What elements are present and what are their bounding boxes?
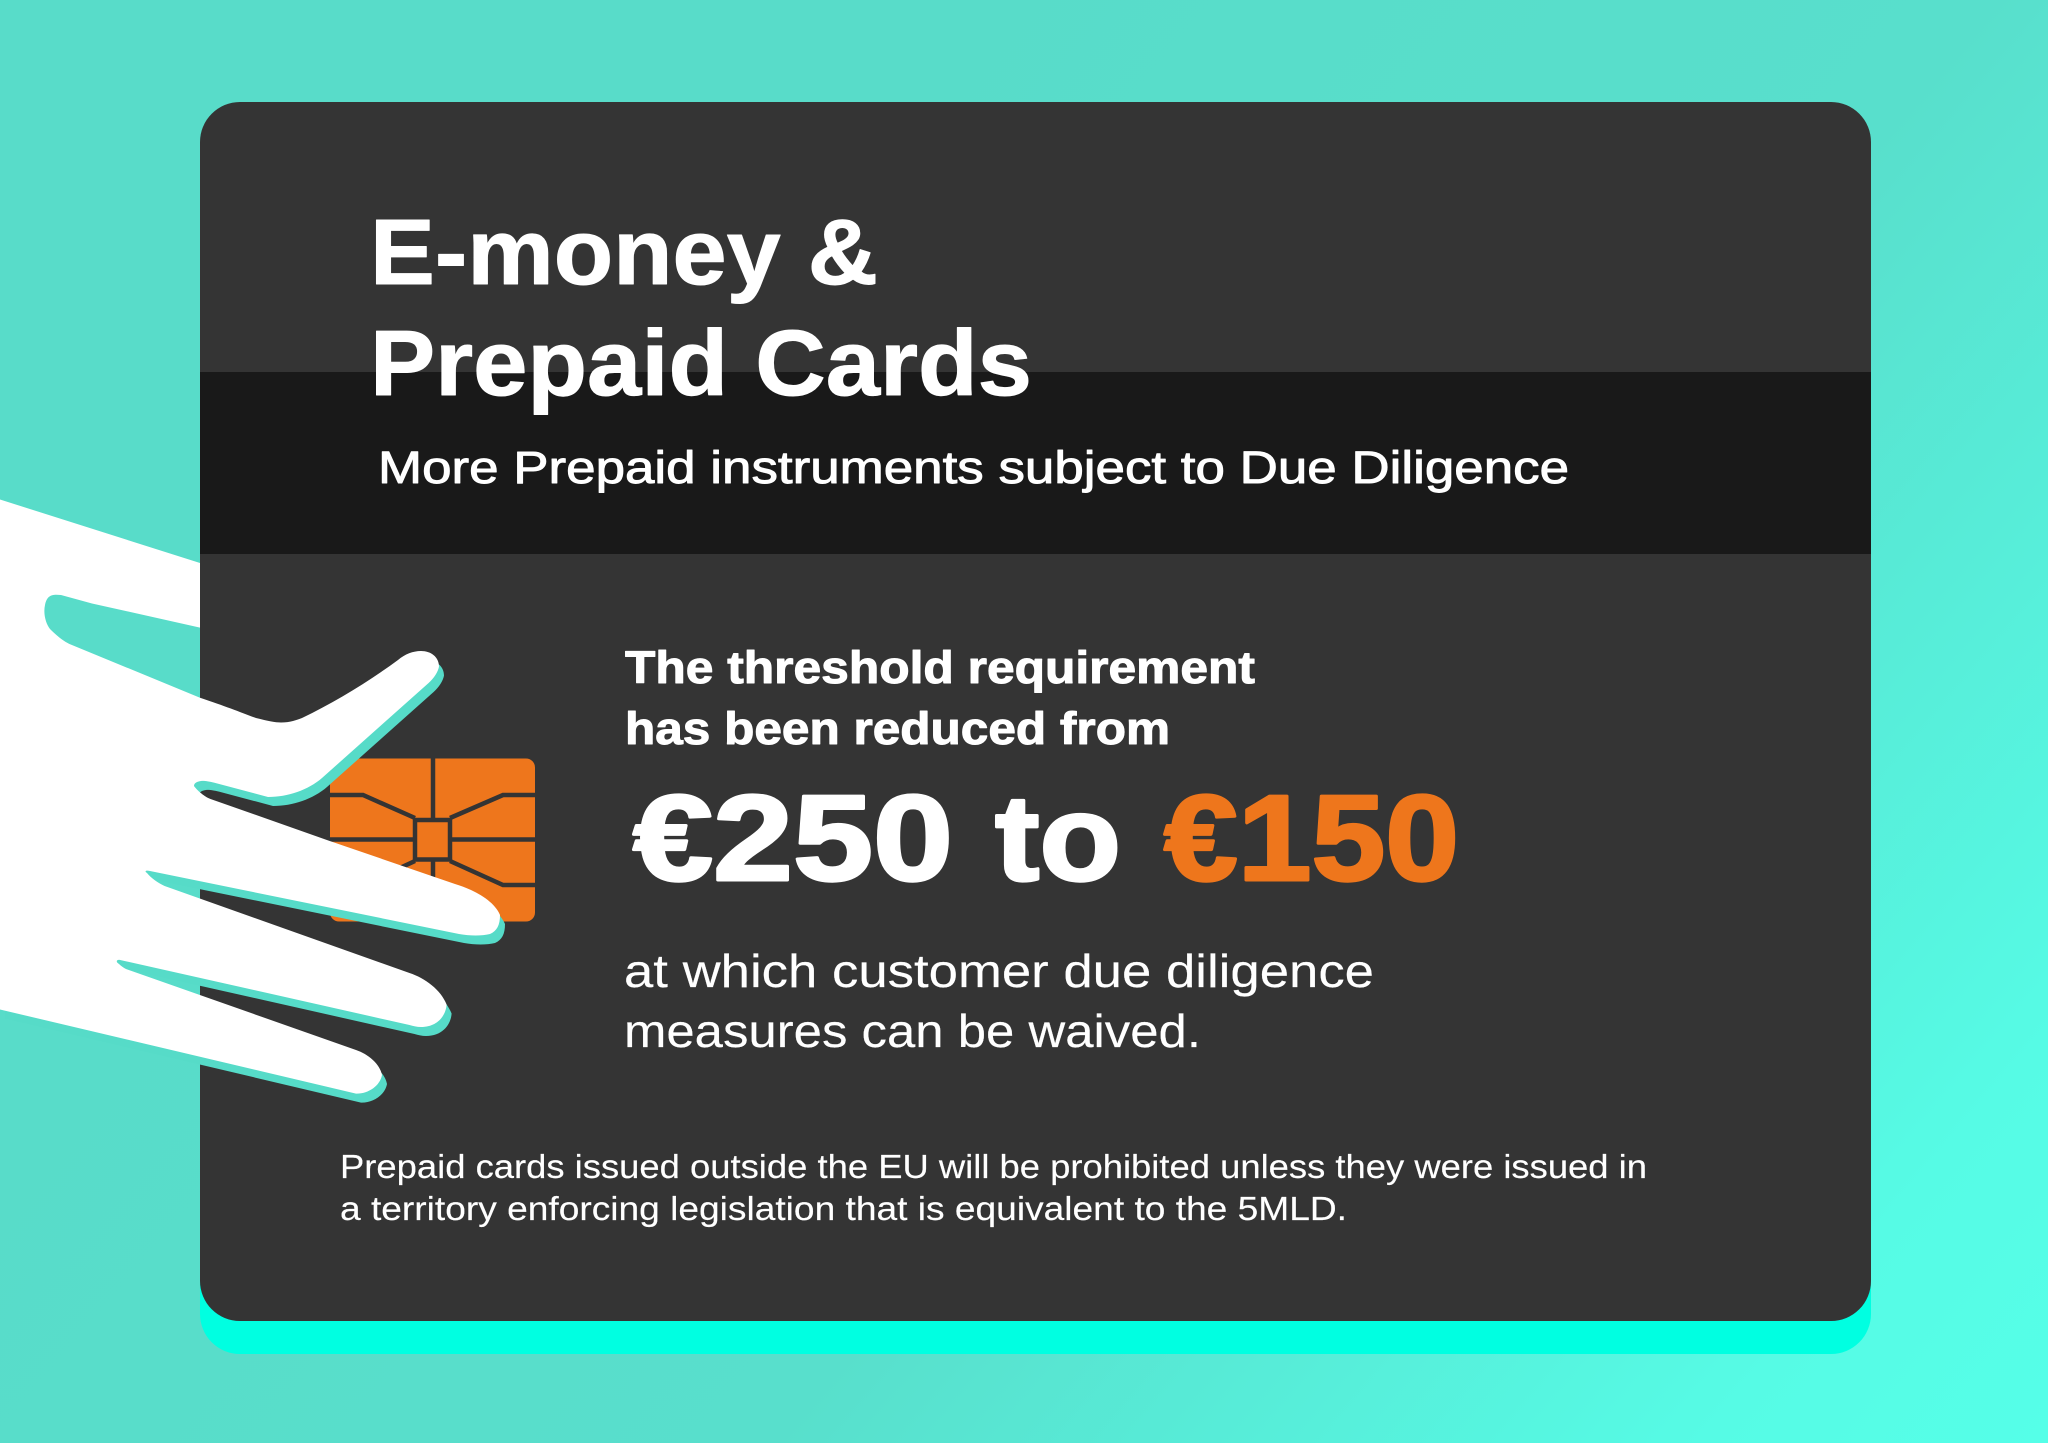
footnote — [340, 1148, 1647, 1227]
icon: hand holding card — [0, 500, 505, 1103]
threshold statement: The threshold requirement — [625, 642, 1255, 693]
footnote: Prepaid cards issued outside the EU will be prohibited unless they were issued in — [340, 1148, 1647, 1185]
header band — [200, 372, 1871, 554]
waiver statement — [624, 945, 1374, 1057]
hand shadow — [5, 649, 505, 1103]
subtitle: More Prepaid instruments subject to Due Diligence — [378, 442, 1569, 493]
title — [370, 200, 1032, 415]
threshold statement: has been reduced from — [625, 703, 1170, 754]
title: Prepaid Cards — [370, 311, 1032, 415]
card bottom edge highlight — [200, 1200, 1871, 1354]
big figures: €250 — [633, 770, 953, 906]
big figures: €150 — [1164, 770, 1459, 906]
big figures — [633, 770, 1459, 906]
icon: orange payment card chip — [330, 758, 535, 922]
title: E-money & — [370, 200, 878, 304]
waiver statement: measures can be waived. — [624, 1005, 1201, 1057]
waiver statement: at which customer due diligence — [624, 945, 1374, 997]
big figures: to — [995, 770, 1121, 906]
hand — [0, 500, 500, 1094]
panel: dark card — [200, 102, 1871, 1321]
footnote: a territory enforcing legislation that is equivalent to the 5MLD. — [340, 1190, 1347, 1227]
threshold statement — [625, 642, 1255, 754]
